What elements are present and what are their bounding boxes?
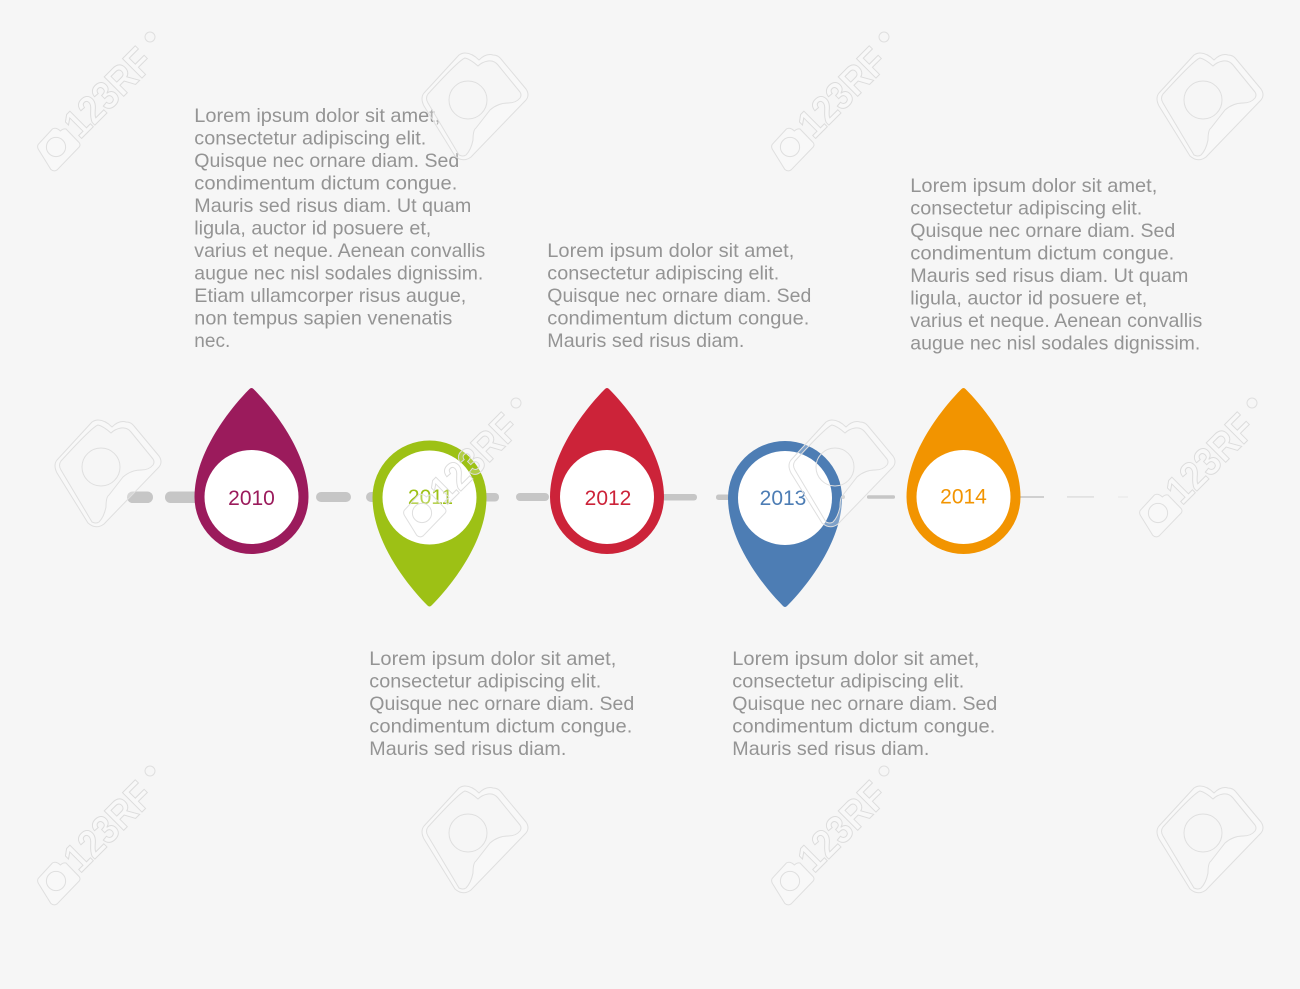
- watermark: 123RF logo 3: 123RF: [421, 406, 528, 512]
- pin: 2010: 2010: [228, 487, 275, 510]
- text block: 2011: [369, 648, 634, 760]
- watermark: 123RF logo 6: [772, 766, 896, 905]
- pin: 2011: [372, 440, 486, 606]
- text block: 2014: Quisque nec ornare diam. Sed: [910, 220, 1175, 242]
- text block: 2010: nec.: [194, 330, 230, 352]
- timeline dashed line: [127, 492, 1128, 503]
- text block: 2013: Lorem ipsum dolor sit amet,: [732, 648, 979, 670]
- text block: 2013: [732, 648, 997, 760]
- pin: 2011: 2011: [408, 486, 453, 509]
- text block: 2013: Quisque nec ornare diam. Sed: [732, 693, 997, 715]
- pin: 2012: [550, 388, 664, 554]
- pin: 2013: 2013: [760, 487, 806, 510]
- watermark: 123RF logo 5: [38, 766, 162, 905]
- text block: 2010: consectetur adipiscing elit.: [194, 127, 426, 149]
- text block: 2010: augue nec nisl sodales dignissim.: [194, 262, 483, 284]
- watermark: 123RF logo 6: 123RF: [789, 774, 896, 880]
- watermark: 123RF logo 5: 123RF: [55, 774, 162, 880]
- text block: 2014: [910, 175, 1203, 354]
- text block: 2012: condimentum dictum congue.: [547, 307, 809, 329]
- watermark: egg 4: [789, 420, 895, 527]
- pin: 2014: 2014: [940, 486, 987, 508]
- watermark: 123RF logo 4: 123RF: [1157, 406, 1264, 512]
- text block: 2014: augue nec nisl sodales dignissim.: [910, 332, 1200, 354]
- pin: 2012: 2012: [585, 487, 631, 510]
- text block: 2012: Lorem ipsum dolor sit amet,: [547, 240, 794, 262]
- watermark: egg 2: [1157, 53, 1263, 160]
- watermark: 123RF logo 2: [772, 32, 896, 171]
- text block: 2014: Mauris sed risus diam. Ut quam: [910, 265, 1188, 287]
- text block: 2010: non tempus sapien venenatis: [194, 307, 453, 329]
- watermark: egg 6: [1157, 786, 1263, 893]
- text block: 2012: [547, 240, 811, 352]
- pin: 2013: [728, 441, 842, 607]
- watermark: 123RF logo 1: 123RF: [55, 40, 162, 146]
- watermark: egg 1: [422, 53, 528, 160]
- text block: 2013: condimentum dictum congue.: [732, 715, 995, 737]
- text block: 2011: Mauris sed risus diam.: [369, 738, 566, 760]
- text block: 2011: Quisque nec ornare diam. Sed: [369, 693, 634, 715]
- text block: 2011: Lorem ipsum dolor sit amet,: [369, 648, 616, 670]
- watermark: 123RF logo 4: [1140, 398, 1264, 537]
- text block: 2012: Quisque nec ornare diam. Sed: [547, 285, 811, 307]
- text block: 2010: condimentum dictum congue.: [194, 172, 457, 194]
- text block: 2010: Lorem ipsum dolor sit amet,: [194, 105, 440, 127]
- text block: 2014: ligula, auctor id posuere et,: [910, 287, 1147, 309]
- text block: 2014: condimentum dictum congue.: [910, 242, 1174, 264]
- text block: 2011: consectetur adipiscing elit.: [369, 670, 601, 692]
- watermark: egg 5: [422, 786, 528, 893]
- pin: 2014: [906, 388, 1020, 554]
- text block: 2012: consectetur adipiscing elit.: [547, 262, 779, 284]
- text block: 2010: Etiam ullamcorper risus augue,: [194, 285, 466, 307]
- text block: 2014: Lorem ipsum dolor sit amet,: [910, 175, 1157, 197]
- text block: 2010: Mauris sed risus diam. Ut quam: [194, 195, 471, 217]
- watermark: egg 3: [55, 420, 161, 527]
- text block: 2012: Mauris sed risus diam.: [547, 330, 744, 352]
- text block: 2010: ligula, auctor id posuere et,: [194, 217, 431, 239]
- watermark: 123RF logo 3: [404, 398, 528, 537]
- text block: 2014: consectetur adipiscing elit.: [910, 197, 1142, 219]
- text block: 2010: varius et neque. Aenean convallis: [194, 240, 486, 262]
- text block: 2013: consectetur adipiscing elit.: [732, 670, 964, 692]
- text block: 2011: condimentum dictum congue.: [369, 715, 632, 737]
- text block: 2010: Quisque nec ornare diam. Sed: [194, 150, 459, 172]
- text block: 2013: Mauris sed risus diam.: [732, 738, 929, 760]
- pin: 2010: [194, 388, 308, 554]
- watermark: 123RF logo 2: 123RF: [789, 40, 896, 146]
- text block: 2014: varius et neque. Aenean convallis: [910, 310, 1203, 332]
- text block: 2010: [194, 105, 486, 352]
- watermark: 123RF logo 1: [38, 32, 162, 171]
